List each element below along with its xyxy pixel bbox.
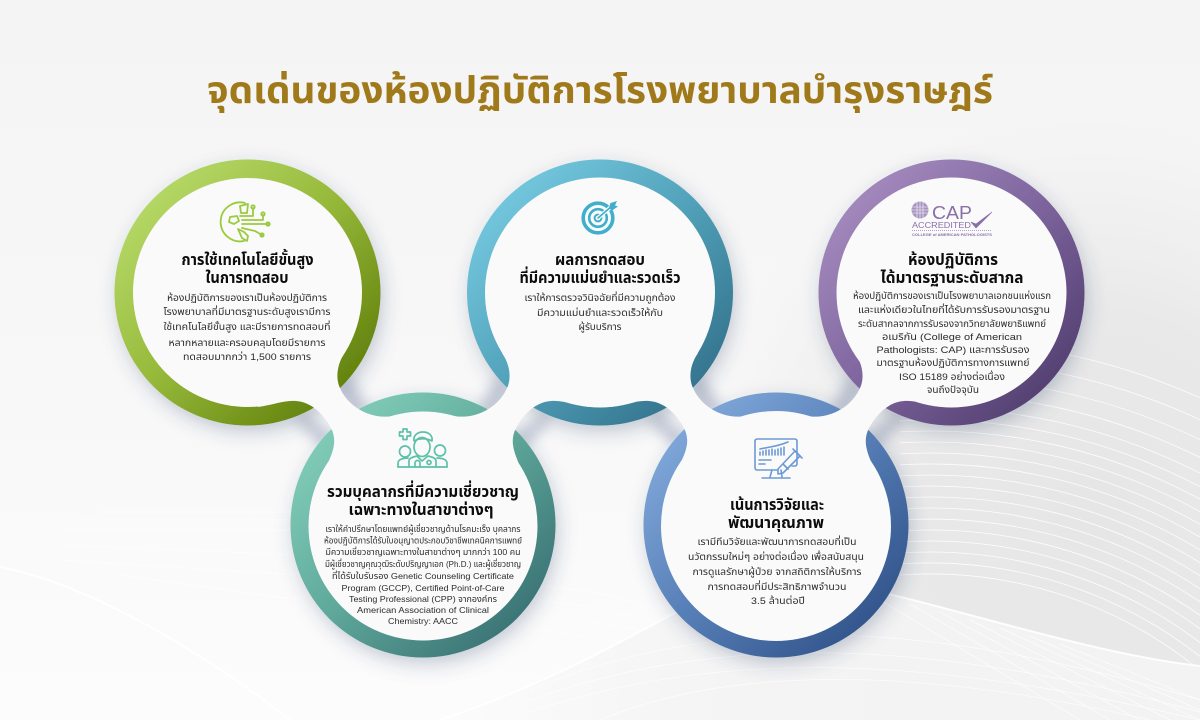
body text: ระดับสากลจากการรับรองจากวิทยาลัยพยาธิแพทย์ [858, 319, 1046, 330]
body text: หลากหลายและครอบคลุมโดยมีรายการ [168, 338, 326, 349]
body text: Testing Professional (CPP) จากองค์กร [349, 594, 497, 604]
icon: monitor and test tube [755, 439, 802, 478]
ring: purple [818, 160, 1084, 426]
body text [688, 535, 864, 607]
body text: ใช้เทคโนโลยีขั้นสูง และมีรายการทดสอบที่ [164, 320, 331, 333]
heading: ได้มาตรฐานระดับสากล [880, 269, 1024, 287]
body text: ห้องปฏิบัติการของเราเป็นห้องปฏิบัติการ [167, 292, 327, 304]
body text: นวัตกรรมใหม่ๆ อย่างต่อเนื่อง เพื่อสนับสนุน [688, 550, 864, 563]
body text: 3.5 ล้านต่อปี [751, 596, 805, 607]
body text [164, 292, 331, 363]
ring: teal [290, 392, 556, 658]
icon: CAP accredited logo: COLLEGE of AMERICAN PATHOLOGISTS [912, 232, 992, 237]
heading: การใช้เทคโนโลยีขั้นสูง [182, 249, 314, 270]
body text: เรามีทีมวิจัยและพัฒนาการทดสอบที่เป็น [698, 535, 856, 548]
body text: ห้องปฏิบัติการได้รับใบอนุญาตประกอบวิชาชีพเทคนิคการแพทย์ [324, 536, 522, 546]
heading: ห้องปฏิบัติการ [908, 251, 998, 269]
heading: ในการทดสอบ [206, 270, 288, 287]
heading: เน้นการวิจัยและ [730, 496, 824, 514]
ring: green [114, 160, 380, 426]
body text: ที่ได้รับใบรับรอง Genetic Counseling Certificate [332, 570, 514, 581]
title: จุดเด่นของห้องปฏิบัติการโรงพยาบาลบำรุงราษฎร์ [207, 70, 993, 113]
body text: อเมริกัน (College of American [882, 332, 1022, 343]
icon: CAP accredited logo [911, 201, 992, 237]
heading [182, 249, 314, 287]
icon: medical team [398, 429, 447, 467]
body text: เราให้คำปรึกษาโดยแพทย์ผู้เชี่ยวชาญด้านโรคมะเร็ง บุคลากร [326, 523, 520, 535]
panel: specialists [324, 429, 522, 626]
heading: พัฒนาคุณภาพ [728, 515, 824, 532]
heading [728, 496, 824, 532]
ring: blue [644, 392, 908, 658]
body text: เราให้การตรวจวินิจฉัยที่มีความถูกต้อง [524, 291, 676, 304]
body text: การทดสอบที่มีประสิทธิภาพจำนวน [708, 580, 846, 593]
neck shadows [296, 372, 904, 452]
body text: Program (GCCP), Certified Point-of-Care [342, 583, 505, 593]
body text: และแห่งเดียวในไทยที่ได้รับการรับรองมาตรฐาน [858, 303, 1050, 316]
body text [324, 523, 522, 626]
body text: มาตรฐานห้องปฏิบัติการทางการแพทย์ [876, 358, 1030, 369]
panel: advanced technology [164, 202, 331, 363]
icon: CAP accredited logo: ACCREDITED [912, 220, 971, 230]
white connected blob [133, 178, 1066, 641]
heading [520, 252, 680, 287]
body text: ทดสอบมากกว่า 1,500 รายการ [183, 352, 311, 363]
body text: ห้องปฏิบัติการของเราเป็นโรงพยาบาลเอกชนแห่งแรก [853, 290, 1051, 302]
icon: tech globe [221, 202, 270, 241]
body text: การดูแลรักษาผู้ป่วย จากสถิติการให้บริการ [692, 566, 862, 578]
ring: cyan [467, 160, 733, 426]
background [0, 245, 1200, 720]
body text [524, 291, 676, 333]
panel: international standard [853, 201, 1051, 396]
icon: target [583, 201, 618, 233]
heading [327, 480, 519, 519]
heading: รวมบุคลากรที่มีความเชี่ยวชาญ [327, 480, 519, 501]
heading: ผลการทดสอบ [555, 252, 645, 269]
body text: โรงพยาบาลที่มีมาตรฐานระดับสูงเรามีการ [164, 305, 331, 318]
body text: Chemistry: AACC [388, 616, 458, 626]
heading: ที่มีความแม่นยำและรวดเร็ว [520, 266, 680, 287]
body text: Pathologists: CAP) และการรับรอง [876, 345, 1030, 356]
body text: จนถึงปัจจุบัน [927, 385, 979, 396]
heading [880, 251, 1024, 287]
body text: มีผู้เชี่ยวชาญคุณวุฒิระดับปริญญาเอก (Ph.D.) และผู้เชี่ยวชาญ [325, 558, 521, 570]
body text: American Association of Clinical [357, 605, 489, 615]
panel: research [688, 439, 864, 607]
body text [853, 290, 1051, 396]
body text: มีความแม่นยำและรวดเร็วให้กับ [537, 308, 663, 319]
body text: มีความเชี่ยวชาญเฉพาะทางในสาขาต่างๆ มากกว่า 100 คน [326, 546, 520, 557]
heading: เฉพาะทางในสาขาต่างๆ [348, 501, 494, 519]
connected circle frame [114, 160, 1084, 658]
icon: CAP accredited logo: CAP [932, 202, 972, 223]
panel: accurate results [520, 201, 680, 333]
body text: ISO 15189 อย่างต่อเนื่อง [899, 370, 1005, 383]
body text: ผู้รับบริการ [578, 322, 622, 333]
